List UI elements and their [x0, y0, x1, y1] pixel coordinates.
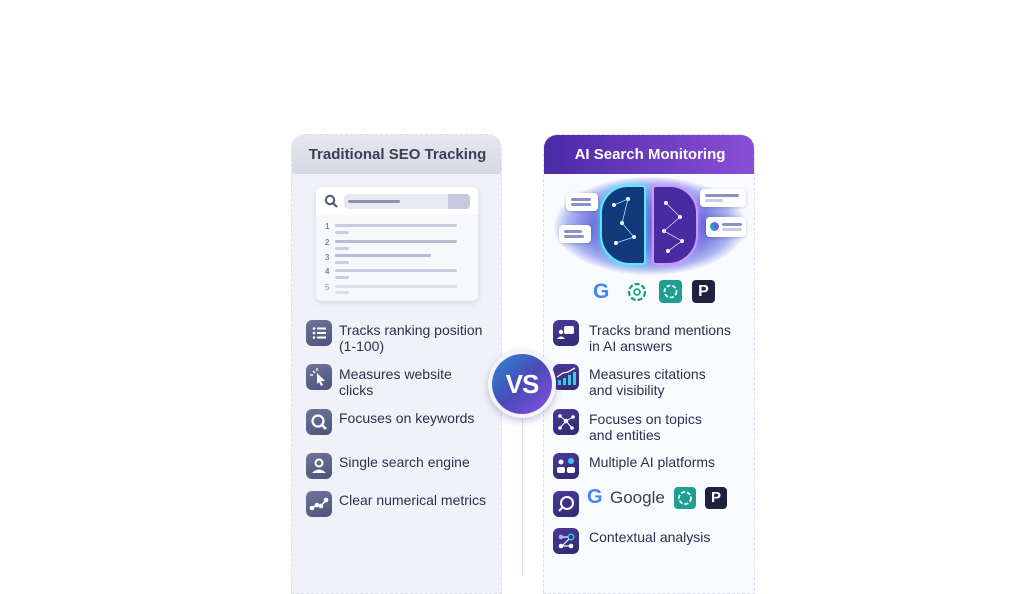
heading: AI Search Monitoring — [544, 135, 756, 174]
item: single search engine — [306, 453, 470, 479]
item: ranking position — [306, 320, 482, 354]
item: numerical metrics: Clear numerical metrics — [339, 492, 486, 508]
item: website clicks — [306, 364, 452, 398]
item: website clicks: Measures website — [339, 366, 452, 382]
item: brand mentions: in AI answers — [589, 338, 672, 354]
item: citations: Measures citations — [589, 366, 706, 382]
item: contextual analysis — [553, 528, 710, 554]
item: website clicks: clicks — [339, 382, 373, 398]
item: platforms logos — [553, 486, 727, 517]
item: citations: and visibility — [589, 382, 664, 398]
badge: VS: VS — [506, 369, 538, 399]
item: single search engine: Single search engine — [339, 454, 470, 470]
search results mockup: 2 — [325, 238, 329, 247]
item: brand mentions: Tracks brand mentions — [589, 322, 731, 338]
search results mockup: 5 — [325, 283, 329, 292]
search results mockup — [316, 187, 478, 301]
item: platforms logos: P — [711, 489, 721, 506]
item: multiple AI platforms: Multiple AI platforms — [589, 454, 715, 470]
logos row — [593, 280, 715, 303]
item: topics and entities — [553, 409, 702, 443]
logos row: P — [698, 283, 709, 300]
item: topics and entities: and entities — [589, 427, 661, 443]
search results mockup: 3 — [325, 253, 329, 262]
item: platforms logos: G — [587, 486, 603, 508]
item: brand mentions — [553, 320, 731, 354]
item: ranking position: (1-100) — [339, 338, 384, 354]
heading: AI Search Monitoring: AI Search Monitoring — [575, 146, 725, 163]
divider line — [522, 415, 523, 576]
search results mockup: 1 — [325, 222, 329, 231]
panel: traditional SEO — [291, 134, 502, 594]
heading: Traditional SEO Tracking — [292, 135, 503, 174]
item: keywords — [306, 409, 474, 435]
heading: Traditional SEO Tracking: Traditional SEO Tracking — [309, 146, 486, 163]
illustration: AI brain — [554, 177, 748, 275]
item: multiple AI platforms — [553, 453, 715, 479]
item: contextual analysis: Contextual analysis — [589, 529, 710, 545]
item: ranking position: Tracks ranking position — [339, 322, 482, 338]
search results mockup: 4 — [325, 267, 329, 276]
item: numerical metrics — [306, 491, 486, 517]
item: topics and entities: Focuses on topics — [589, 411, 702, 427]
item: citations — [553, 364, 706, 398]
badge: VS — [488, 350, 556, 418]
chat bubbles — [566, 193, 598, 211]
item: keywords: Focuses on keywords — [339, 410, 474, 426]
item: platforms logos: Google — [610, 488, 665, 507]
logos row: G — [593, 280, 609, 303]
panel: AI search monitoring — [543, 134, 755, 594]
